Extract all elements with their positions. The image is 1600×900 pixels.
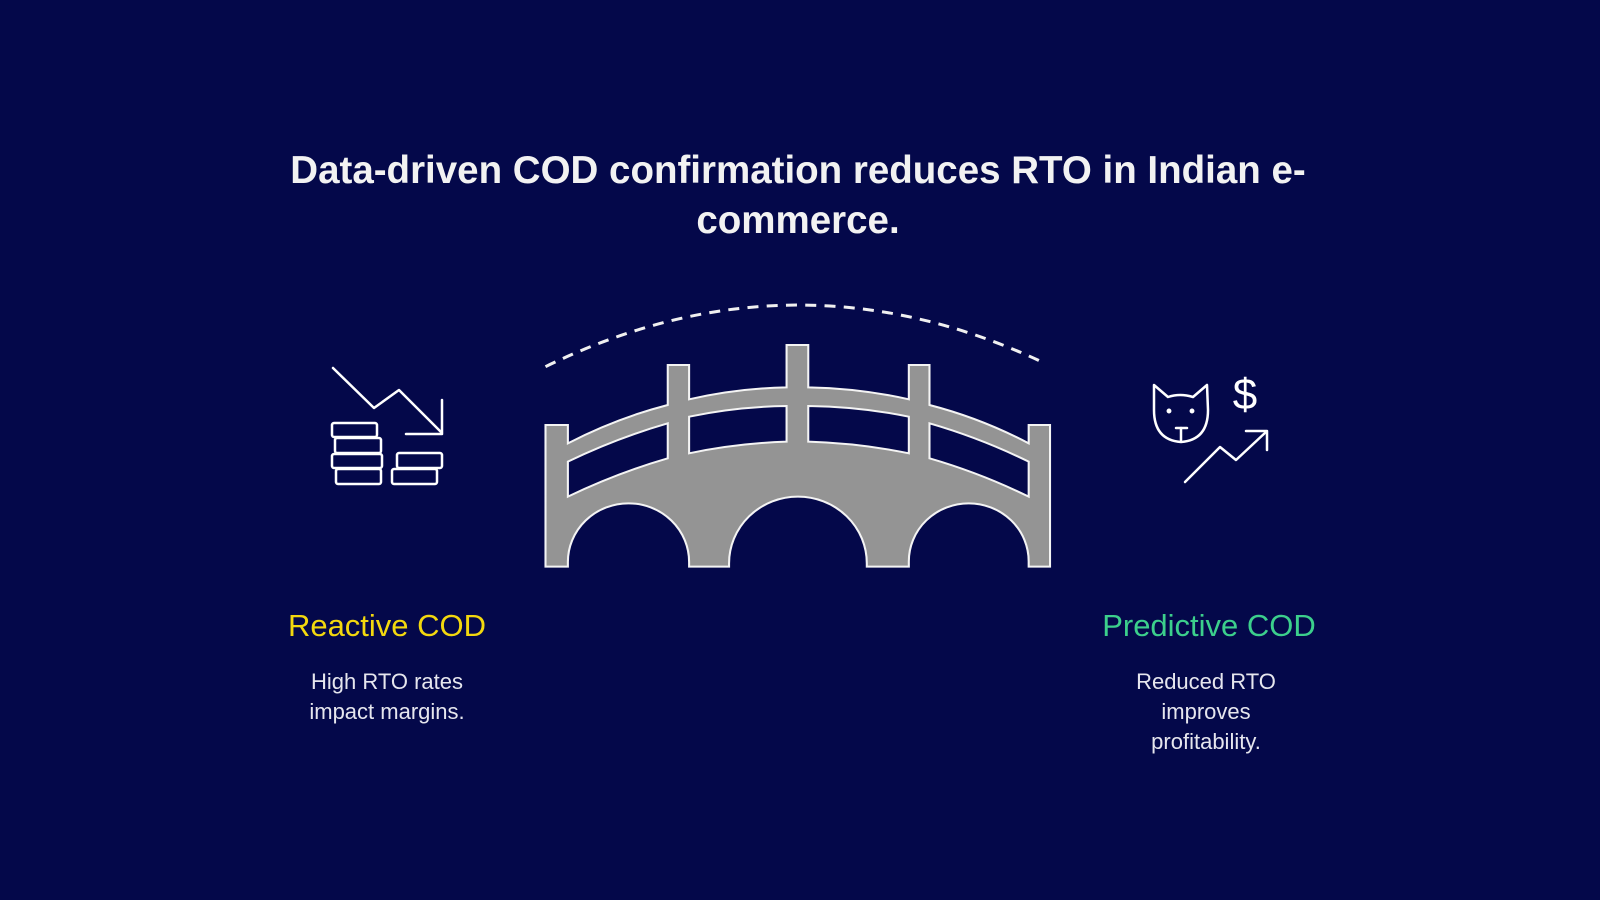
text: reactive description [309,669,465,724]
text: predictive description: improves [1161,699,1251,724]
title: Data-driven COD confirmation reduces RTO in Indian e- [290,149,1306,192]
icon: cat with dollar and rising arrow [1152,370,1268,484]
label: Predictive COD: Predictive COD [1102,608,1316,643]
text: predictive description [1136,669,1276,754]
title [290,149,1306,242]
text: predictive description: profitability. [1151,729,1261,754]
dashed arc [545,305,1041,367]
icon: cat with dollar and rising arrow: $ [1233,370,1257,419]
bridge body [545,345,1050,567]
label: Reactive COD: Reactive COD [288,608,486,643]
text: reactive description: High RTO rates [311,669,463,694]
bridge illustration [544,304,1052,568]
icon: falling chart with coins [330,366,444,486]
title: commerce. [696,199,900,242]
text: reactive description: impact margins. [309,699,465,724]
text: predictive description: Reduced RTO [1136,669,1276,694]
